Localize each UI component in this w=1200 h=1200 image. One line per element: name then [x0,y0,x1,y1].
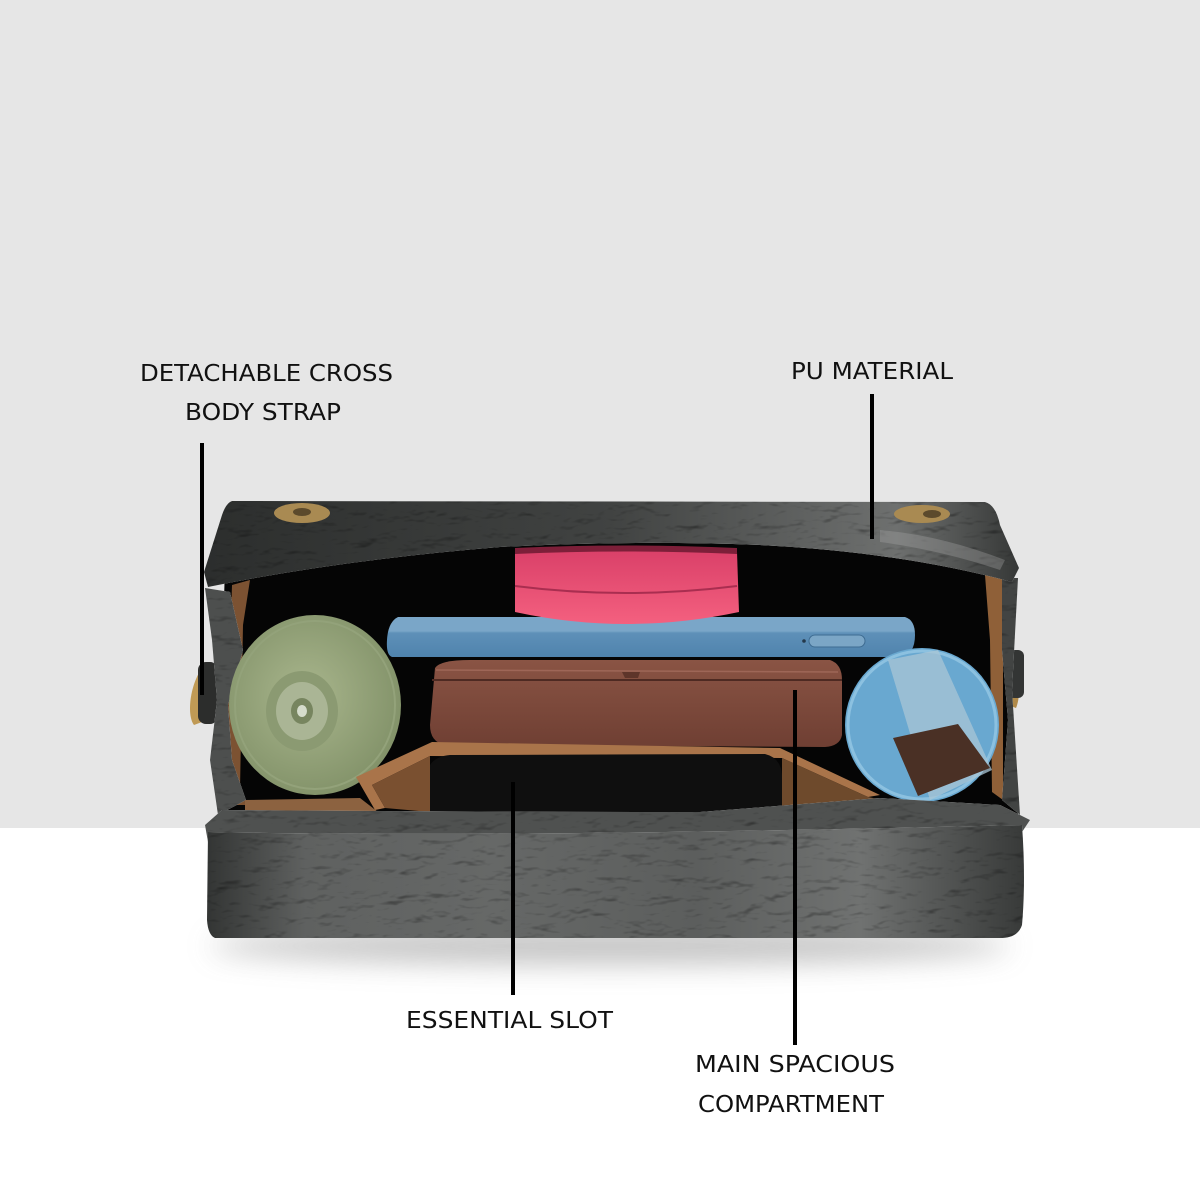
right inner lining [985,575,1003,800]
right strap ring [1003,645,1024,708]
label: essential slot: ESSENTIAL SLOT [406,1008,614,1034]
wallet [430,660,842,747]
green bottle [229,615,401,795]
flap highlight [880,530,1005,570]
leader line: essential slot [511,782,515,995]
snap right [894,505,950,523]
leader line: strap [200,443,204,695]
pink compact [515,546,739,624]
front panel rim [205,798,1030,842]
left side wall [205,588,246,815]
right side wall [1002,578,1020,815]
background floor [0,828,1200,1200]
label: detachable cross body strap: BODY STRAP [185,400,341,426]
flap top [204,501,1019,587]
label: detachable cross body strap [140,361,393,426]
label: main spacious compartment: MAIN SPACIOUS [695,1052,895,1078]
front panel [207,825,1024,938]
leader line: PU material [870,394,874,539]
inner floor lining [245,798,378,812]
bag interior [218,540,1018,815]
handbag illustration [190,501,1030,938]
background wall [0,0,1200,828]
phone [387,617,915,657]
black power bank [430,754,782,815]
label: PU material: PU MATERIAL [791,359,953,385]
bag shadow [210,928,1010,964]
blue perfume cap [845,648,999,802]
leader line: main compartment [793,690,797,1045]
snap left [274,503,330,523]
left inner lining [225,580,250,805]
label: main spacious compartment [695,1052,895,1118]
inner right floor lining [782,758,900,812]
left strap ring [190,662,218,725]
inner middle lining [372,756,430,812]
label: detachable cross body strap: DETACHABLE CROSS [140,361,393,387]
tan essential slot lining [356,742,880,810]
label: main spacious compartment: COMPARTMENT [698,1092,885,1118]
